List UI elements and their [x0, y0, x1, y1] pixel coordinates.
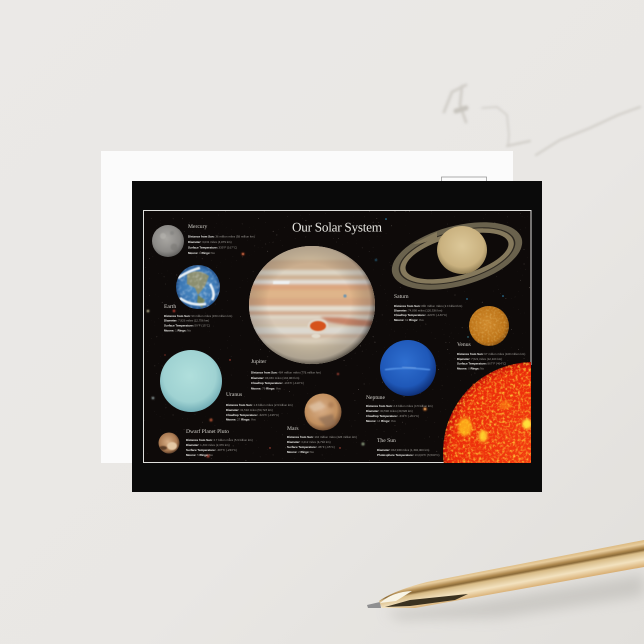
pen body: [379, 540, 644, 608]
planet: Neptune: [380, 340, 436, 396]
planet: Jupiter: [249, 246, 375, 364]
planet: Mercury: [152, 225, 184, 257]
text: Earth: [164, 304, 232, 332]
text: Pluto: Surface Temperature: -387°F (-233°C): [186, 448, 237, 452]
text: Jupiter: Distance from Sun: 484 million miles (778 million km): [251, 370, 321, 374]
marble veins: [444, 85, 640, 155]
text: Jupiter: [251, 359, 321, 390]
text: Jupiter: Jupiter: [251, 359, 266, 365]
text: Uranus: Cloudtop Temperature: -320°F (-195°C): [226, 413, 279, 417]
title: Our Solar System: [292, 220, 383, 234]
text: Pluto: Distance from Sun: 3.7 billion miles (5.9 billion km): [186, 438, 253, 442]
solar prominence: [472, 383, 474, 386]
light inner ring wedge: [413, 232, 437, 244]
text: Venus: Venus: [457, 342, 471, 348]
text: Pluto: Dwarf Planet Pluto: [186, 429, 229, 435]
text: Earth: Surface Temperature: 59°F (15°C): [164, 324, 210, 328]
text: Saturn: Moons: 62 Rings: Yes: [394, 318, 424, 322]
text: Mars: [287, 426, 357, 454]
text: Saturn: Saturn: [394, 294, 409, 300]
text: Jupiter: Diameter: 88,846 miles (142,984 km): [251, 376, 299, 380]
text: Pluto: [186, 429, 253, 457]
text: Mars: Moons: 2 Rings: No: [287, 450, 314, 454]
text: Saturn: Distance from Sun: 886 million miles (1.4 billion km): [394, 304, 462, 308]
planet: Saturn: [385, 210, 529, 302]
text: Uranus: [226, 392, 293, 422]
text: Venus: Distance from Sun: 67 million miles (108 million km): [457, 352, 525, 356]
text: Uranus: Moons: 27 Rings: Yes: [226, 418, 256, 422]
text: Mars: Mars: [287, 426, 298, 432]
postage stamp box: [442, 177, 486, 183]
text: Saturn: Diameter: 74,898 miles (120,536 km): [394, 308, 442, 312]
great red spot: [308, 319, 328, 333]
text: Mercury: Mercury: [188, 224, 207, 230]
text: Jupiter: Cloudtop Temperature: -166°F (-110°C): [251, 381, 304, 385]
text: Venus: Diameter: 7,521 miles (12,104 km): [457, 357, 502, 361]
pen shadow: [385, 574, 644, 620]
text: Venus: [457, 342, 525, 370]
pen highlight: [380, 591, 412, 603]
text: Mercury: Surface Temperature: 333°F (167°C): [188, 246, 237, 250]
text: Pluto: Diameter: 1,400 miles (2,376 km): [186, 443, 230, 447]
postcard back: [101, 151, 513, 463]
white frame: [144, 210, 531, 463]
text: Earth: Distance from Sun: 93 million miles (150 million km): [164, 314, 232, 318]
text: Neptune: Diameter: 30,598 miles (49,528 km): [366, 409, 413, 413]
planet: Uranus: [160, 350, 222, 412]
globe: [437, 226, 487, 274]
text: Venus: Moons: 0 Rings: No: [457, 366, 484, 370]
text: Mars: Distance from Sun: 142 million miles (228 million km): [287, 435, 357, 439]
planet: Earth: [176, 265, 220, 309]
text: The Sun: [377, 438, 440, 457]
text: Mercury: [188, 224, 255, 255]
space background: [143, 210, 531, 463]
blue spot: [343, 294, 347, 298]
text: Earth: Moons: 1 Rings: No: [164, 328, 191, 332]
text: Saturn: [394, 294, 462, 322]
text: Mercury: Moons: 0 Rings: No: [188, 251, 215, 255]
text: Neptune: [366, 395, 433, 423]
pen tip: [367, 602, 381, 608]
postcard black front: [132, 181, 542, 492]
text: The Sun: Photosphere Temperature: 10,000°F (5,500°C): [377, 453, 440, 457]
text: Mars: Surface Temperature: -85°F (-65°C): [287, 445, 335, 449]
text: Uranus: Distance from Sun: 1.8 billion miles (2.9 billion km): [226, 403, 293, 407]
dwarf planet: Pluto: [158, 432, 180, 454]
text: Jupiter: Moons: 79 Rings: Yes: [251, 386, 281, 390]
text: Neptune: Moons: 14 Rings: Yes: [366, 419, 396, 423]
text: Mercury: Diameter: 3,031 miles (4,879 km): [188, 240, 232, 244]
text: Uranus: Diameter: 31,518 miles (50,724 km): [226, 408, 273, 412]
text: Neptune: Cloudtop Temperature: -331°F (-201°C): [366, 414, 419, 418]
text: Earth: Earth: [164, 304, 176, 310]
pen reflection: [385, 594, 468, 607]
rings: [385, 210, 529, 302]
star field: [143, 210, 531, 463]
text: Pluto: Moons: 5 Rings: No: [186, 453, 213, 457]
text: Neptune: Distance from Sun: 2.8 billion miles (4.5 billion km): [366, 404, 433, 408]
text: The Sun: The Sun: [377, 438, 396, 444]
white oval clouds: [273, 281, 290, 284]
planet: Mars: [304, 394, 342, 430]
gold pen: [367, 540, 644, 608]
text: Neptune: Neptune: [366, 395, 385, 401]
text: Mars: Diameter: 4,212 miles (6,792 km): [287, 440, 331, 444]
text: Venus: Surface Temperature: 867°F (464°C): [457, 362, 506, 366]
text: Earth: Diameter: 7,926 miles (12,756 km): [164, 318, 209, 322]
planet: Venus: [469, 306, 509, 346]
the Sun: [443, 362, 531, 463]
text: The Sun: Diameter: 864,938 miles (1,392,000 km): [377, 448, 429, 452]
text: Saturn: Cloudtop Temperature: -220°F (-140°C): [394, 313, 447, 317]
text: Mercury: Distance from Sun: 36 million miles (58 million km): [188, 234, 255, 238]
text: Uranus: Uranus: [226, 392, 242, 398]
